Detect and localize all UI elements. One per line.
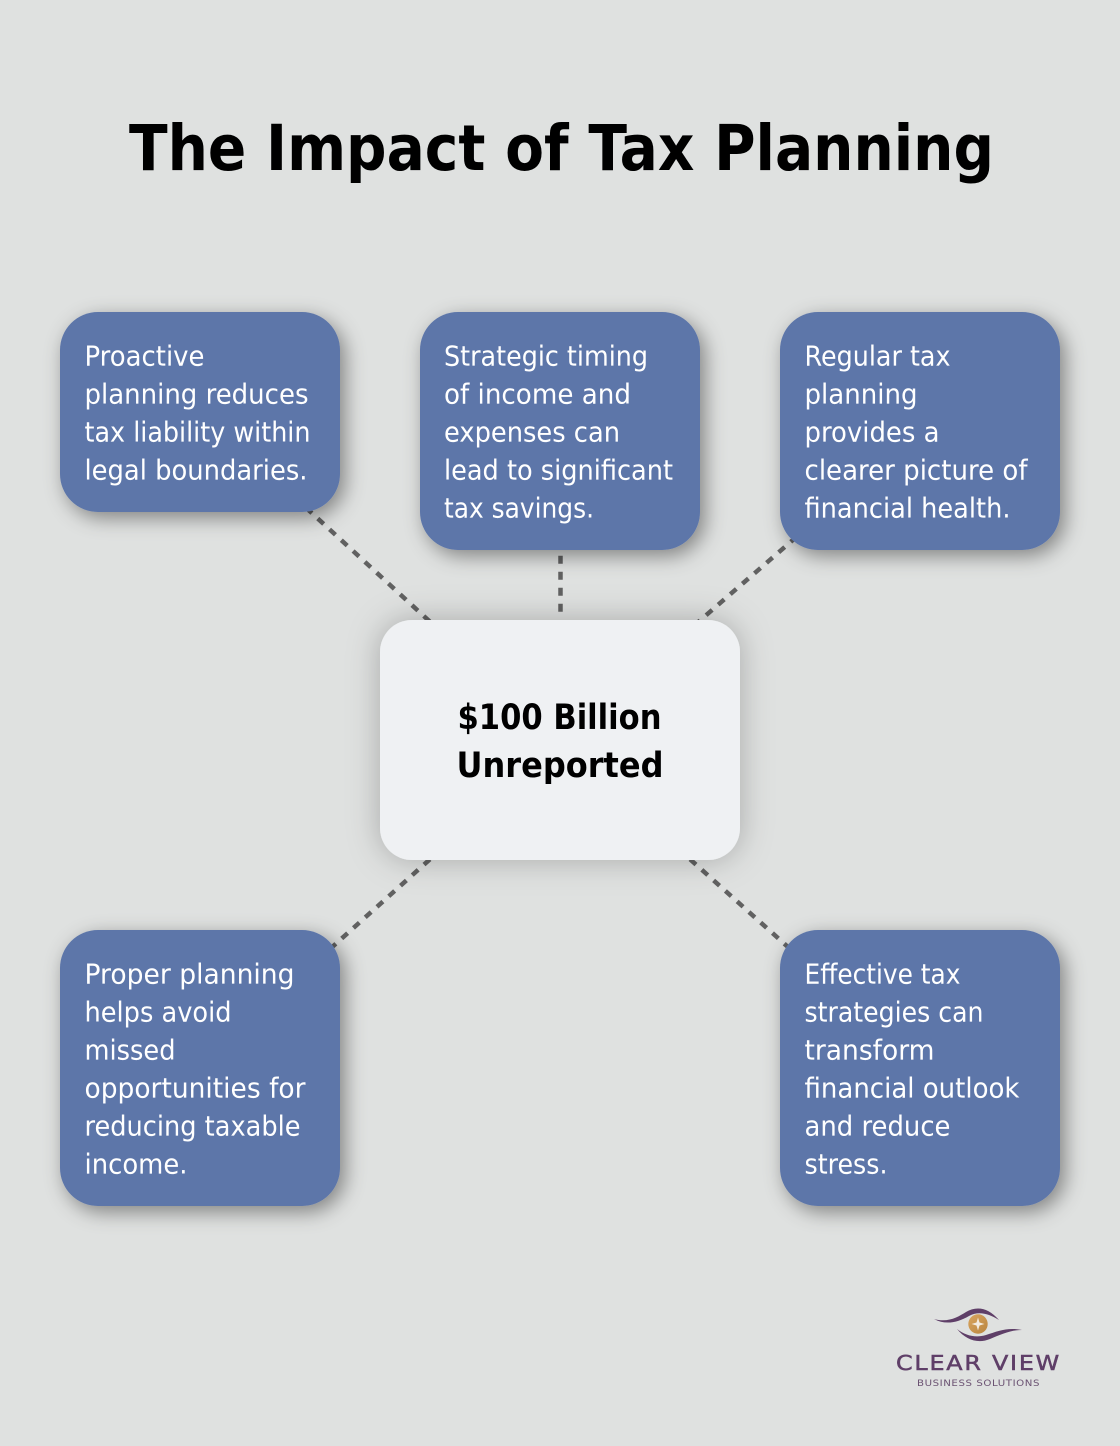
logo tagline: BUSINESS SOLUTIONS [917, 1379, 1040, 1389]
panel: proactive planning: Proactive [84, 340, 204, 372]
panel: regular tax planning: planning [804, 378, 918, 410]
panel: centre stat [380, 620, 740, 860]
panel: effective strategies: Effective tax [804, 958, 960, 990]
panel: proper planning [60, 930, 340, 1206]
panel: proactive planning [60, 312, 340, 512]
panel: effective strategies [780, 930, 1060, 1206]
panel: effective strategies: and reduce [804, 1110, 950, 1142]
logo: Clear View Business Solutions [896, 1308, 1061, 1389]
panel: effective strategies: stress. [804, 1148, 888, 1180]
panel: proper planning: missed [84, 1034, 176, 1066]
panel: regular tax planning: provides a [804, 416, 940, 448]
panel: centre stat: $100 Billion [458, 698, 662, 738]
panel: proper planning: reducing taxable [84, 1110, 300, 1142]
panel: strategic timing: Strategic timing [444, 340, 648, 372]
panel: centre stat: Unreported [456, 746, 664, 786]
connector: top-middle card to centre [558, 556, 563, 612]
panel: effective strategies: strategies can [804, 996, 984, 1028]
connector: bottom-right card to centre [690, 859, 792, 951]
panel: regular tax planning: Regular tax [804, 340, 950, 372]
panel: strategic timing [420, 312, 700, 550]
panel: proactive planning: tax liability within [84, 416, 310, 448]
panel: proper planning: helps avoid [84, 996, 232, 1028]
connector: top-left card to centre [306, 508, 432, 624]
panel: proper planning: opportunities for [84, 1072, 306, 1104]
panel: strategic timing: lead to significant [444, 454, 673, 486]
panel: strategic timing: expenses can [444, 416, 620, 448]
connector: top-right card to centre [695, 537, 797, 625]
panel: proper planning: income. [84, 1148, 188, 1180]
panel: regular tax planning [780, 312, 1060, 550]
panel: strategic timing: tax savings. [444, 492, 594, 524]
title: The Impact of Tax Planning [129, 112, 994, 185]
logo wordmark: CLEAR VIEW [896, 1351, 1061, 1375]
panel: strategic timing: of income and [444, 378, 631, 410]
panel: proactive planning: legal boundaries. [84, 454, 308, 486]
connector: bottom-left card to centre [328, 859, 430, 951]
panel: effective strategies: financial outlook [804, 1072, 1020, 1104]
icon: eye with gold star [934, 1308, 1022, 1341]
panel: regular tax planning: clearer picture of [804, 454, 1029, 486]
panel: regular tax planning: financial health. [804, 492, 1010, 524]
panel: proper planning: Proper planning [84, 958, 294, 990]
panel: effective strategies: transform [804, 1034, 934, 1066]
panel: proactive planning: planning reduces [84, 378, 308, 410]
